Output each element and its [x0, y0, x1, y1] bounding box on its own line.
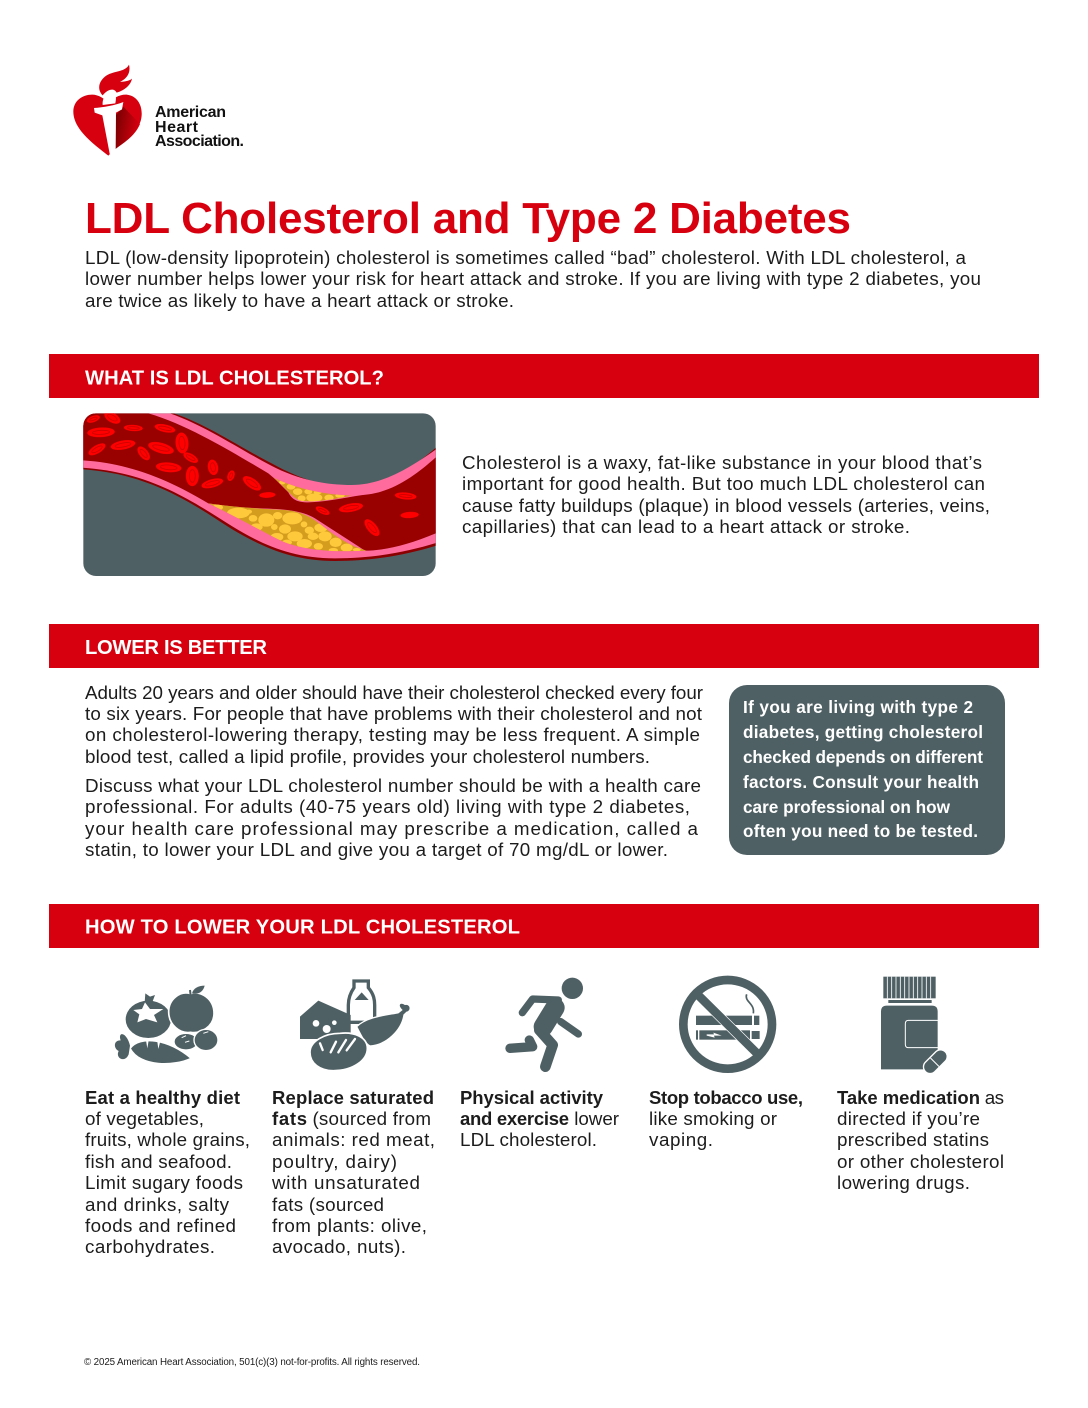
callout: type 2 diabetes testing: factors. Consult your health [743, 772, 979, 792]
section heading: how to lower [49, 904, 1039, 948]
callout: type 2 diabetes testing: care professional on how [743, 797, 951, 817]
text: what cholesterol is: cause fatty buildups (plaque) in blood vessels (arteries, veins, [462, 495, 990, 516]
logo wordmark: American [155, 104, 226, 121]
text: replace saturated fats: (sourced from [307, 1108, 431, 1129]
text: stop tobacco use [649, 1087, 803, 1150]
text: what cholesterol is: important for good health. But too much LDL cholesterol can [462, 473, 985, 494]
text: testing guidance: to six years. For people that have problems with their cholesterol and not [85, 703, 703, 724]
text: physical activity: Physical activity [460, 1087, 604, 1108]
icon: no smoking or vaping [683, 980, 772, 1069]
column: healthy diet [85, 986, 250, 1257]
text: eat a healthy diet: and drinks, salty [85, 1194, 230, 1215]
text: eat a healthy diet [85, 1087, 250, 1257]
text: LDL target: professional. For adults (40-75 years old) living with type 2 diabetes, [85, 796, 690, 817]
text: replace saturated fats: with unsaturated [271, 1172, 420, 1193]
intro text [85, 247, 981, 311]
icon: pill bottle [881, 977, 951, 1077]
text: stop tobacco use: Stop tobacco use, [649, 1087, 803, 1108]
text: replace saturated fats: fats [272, 1108, 307, 1129]
icon: fruit and vegetables [115, 986, 218, 1064]
callout: type 2 diabetes testing: diabetes, getting cholesterol [743, 722, 983, 742]
text: testing guidance: Adults 20 years and older should have their cholesterol checked every four [85, 682, 703, 703]
text: eat a healthy diet: Limit sugary foods [85, 1172, 243, 1193]
text: take medication: prescribed statins [837, 1129, 989, 1150]
column: take medication [837, 977, 1004, 1193]
text: eat a healthy diet: Eat a healthy diet [85, 1087, 240, 1108]
text: what cholesterol is: capillaries) that can lead to a heart attack or stroke. [462, 516, 910, 537]
illustration: artery with plaque [75, 409, 438, 576]
text: replace saturated fats: animals: red meat, [272, 1129, 435, 1150]
text: physical activity: LDL cholesterol. [460, 1129, 597, 1150]
text: take medication: Take medication [837, 1087, 980, 1108]
section heading: how to lower: HOW TO LOWER YOUR LDL CHOLESTEROL [85, 916, 520, 938]
text: LDL target: your health care professional may prescribe a medication, called a [85, 818, 699, 839]
text: physical activity: and exercise [460, 1108, 569, 1129]
callout: type 2 diabetes testing: often you need to be tested. [743, 821, 978, 841]
text: eat a healthy diet: carbohydrates. [85, 1236, 215, 1257]
text: testing guidance [85, 682, 703, 767]
title: LDL Cholesterol and Type 2 Diabetes [85, 194, 851, 243]
text: physical activity [460, 1087, 619, 1150]
text: replace saturated fats: from plants: olive, [272, 1215, 427, 1236]
text: eat a healthy diet: fruits, whole grains, [85, 1129, 250, 1150]
intro text: lower number helps lower your risk for heart attack and stroke. If you are living with type 2 diabetes, you [85, 268, 981, 289]
column: replace saturated fats [271, 981, 435, 1257]
text: take medication: or other cholesterol [837, 1151, 1004, 1172]
text: take medication: lowering drugs. [837, 1172, 970, 1193]
text: LDL target [85, 775, 701, 860]
icon: dairy, meat and poultry [300, 981, 410, 1071]
text: what cholesterol is [462, 452, 990, 537]
callout: type 2 diabetes testing [729, 685, 1005, 855]
text: LDL target: Discuss what your LDL cholesterol number should be with a health care [85, 775, 701, 796]
text: testing guidance: on cholesterol-lowering therapy, testing may be less frequent. A simple [85, 724, 700, 745]
logo wordmark: Association. [155, 133, 244, 150]
footer copyright: © 2025 American Heart Association, 501(c)(3) not-for-profits. All rights reserved. [84, 1357, 420, 1368]
text: replace saturated fats: Replace saturated [272, 1087, 434, 1108]
icon: runner [510, 978, 583, 1067]
text: eat a healthy diet: of vegetables, [85, 1108, 204, 1129]
text: replace saturated fats [271, 1087, 435, 1257]
text: eat a healthy diet: foods and refined [85, 1215, 236, 1236]
text: replace saturated fats: fats (sourced [272, 1194, 384, 1215]
text: take medication [837, 1087, 1004, 1193]
intro text: LDL (low-density lipoprotein) cholesterol is sometimes called “bad” cholesterol. With LDL cholesterol, a [85, 247, 967, 268]
text: what cholesterol is: Cholesterol is a waxy, fat-like substance in your blood that’s [462, 452, 982, 473]
section heading: what is LDL cholesterol [49, 354, 1039, 398]
text: physical activity: lower [569, 1108, 619, 1129]
text: stop tobacco use: like smoking or [649, 1108, 777, 1129]
intro text: are twice as likely to have a heart attack or stroke. [85, 290, 514, 311]
text: replace saturated fats: poultry, dairy) [272, 1151, 397, 1172]
callout: type 2 diabetes testing: checked depends on different [743, 747, 983, 767]
text: take medication: as [980, 1087, 1004, 1108]
text: LDL target: statin, to lower your LDL and give you a target of 70 mg/dL or lower. [85, 839, 668, 860]
column: stop tobacco [649, 980, 803, 1150]
section heading: what is LDL cholesterol: WHAT IS LDL CHOLESTEROL? [85, 368, 384, 390]
section heading: lower is better: LOWER IS BETTER [85, 637, 267, 659]
section heading: lower is better [49, 624, 1039, 668]
text: eat a healthy diet: fish and seafood. [85, 1151, 232, 1172]
callout: type 2 diabetes testing: If you are living with type 2 [743, 697, 973, 717]
text: testing guidance: blood test, called a lipid profile, provides your cholesterol numbers. [85, 746, 650, 767]
text: replace saturated fats: avocado, nuts). [272, 1236, 406, 1257]
text: take medication: directed if you’re [837, 1108, 980, 1129]
logo wordmark: Heart [155, 119, 199, 136]
icon: heart and torch [73, 65, 142, 156]
logo wordmark [155, 104, 244, 150]
column: physical activity [460, 978, 619, 1150]
text: stop tobacco use: vaping. [649, 1129, 713, 1150]
logo: American Heart Association [73, 65, 244, 156]
